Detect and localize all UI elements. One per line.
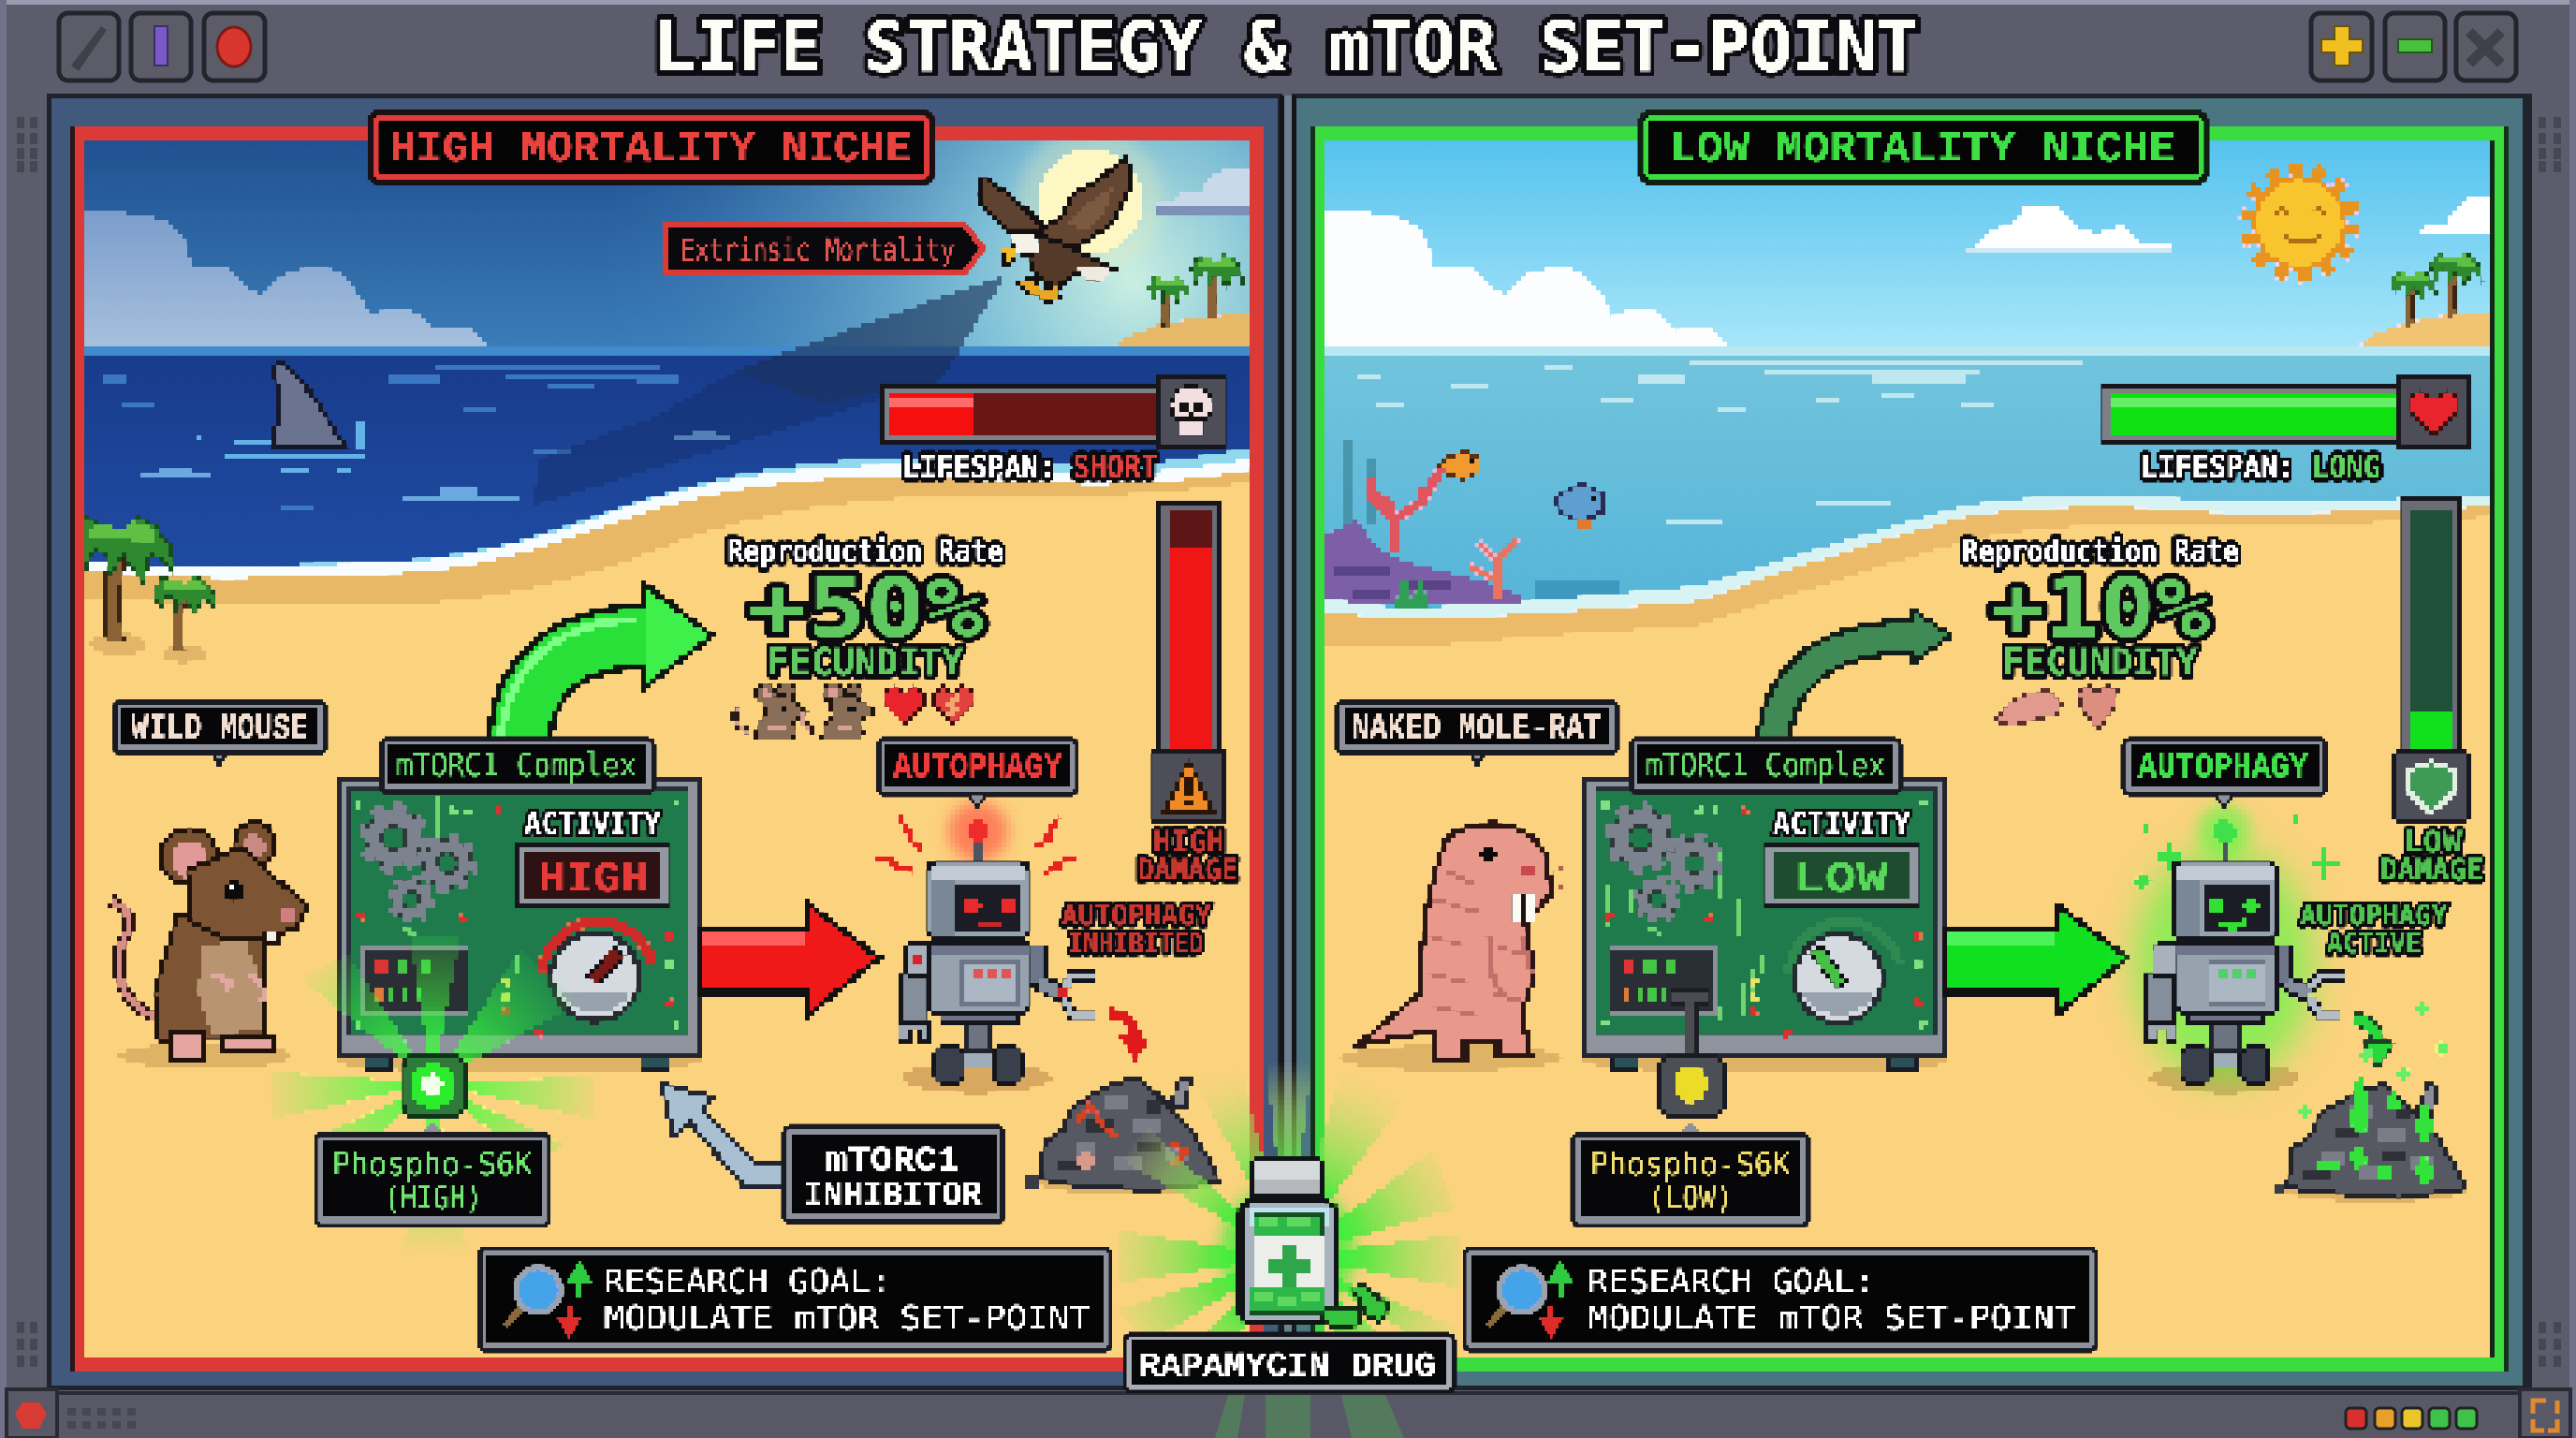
fish: orange xyxy=(1438,451,1479,479)
node: phospho-S6K high xyxy=(402,1056,464,1116)
icon: magnifier and arrows xyxy=(505,1266,588,1333)
callout: research goal left: MODULATE mTOR SET-POINT xyxy=(604,1299,1090,1338)
label: phospho-S6K low: (LOW) xyxy=(1648,1180,1733,1217)
illustration: naked mole-rat xyxy=(1339,824,1565,1071)
label: phospho-S6K high: Phospho-S6K xyxy=(332,1146,533,1183)
damage gauge: high xyxy=(1151,502,1225,822)
damage gauge: low xyxy=(2395,500,2467,822)
stat: +10 percent: +10% xyxy=(1990,560,2210,656)
label: naked mole-rat: NAKED MOLE-RAT xyxy=(1352,709,1602,751)
icons: mice and hearts xyxy=(735,683,973,740)
text: activity: ACTIVITY xyxy=(524,805,661,842)
board: mTORC1 complex low xyxy=(1582,779,1949,1073)
tag: extrinsic mortality: Extrinsic Mortality xyxy=(681,231,955,268)
window buttons: right xyxy=(2311,13,2516,81)
callout: research goal left xyxy=(480,1249,1110,1350)
center divider xyxy=(1280,95,1296,1388)
icon: magnifier and arrows right xyxy=(1488,1266,1569,1333)
connector: low signal stem xyxy=(1672,990,1709,1058)
label: rapamycin drug xyxy=(1125,1335,1454,1391)
glow rays and rapamycin bottle xyxy=(1114,1058,1460,1348)
label: autophagy active header: AUTOPHAGY xyxy=(2138,748,2308,788)
icon: smiling sun xyxy=(2247,170,2352,275)
stat: +50 percent: +50% xyxy=(748,560,984,656)
callout: research goal left: RESEARCH GOAL: xyxy=(604,1263,891,1301)
arrow: red curved to debris xyxy=(1109,1013,1151,1064)
text: autophagy active: ACTIVE xyxy=(2327,928,2422,961)
label: low damage: LOW xyxy=(2404,824,2463,859)
label: mTORC1 complex high xyxy=(382,740,653,792)
arrow: low fecundity xyxy=(1774,605,1955,749)
icons: mole-rat and heart xyxy=(1996,685,2117,730)
label: wild mouse: WILD MOUSE xyxy=(131,709,308,751)
icon: skull xyxy=(1171,387,1212,436)
dial: low xyxy=(1789,922,1899,1025)
glow rays: phospho high xyxy=(271,936,594,1259)
label: naked mole-rat xyxy=(1338,702,1617,765)
text: fecundity right: FECUNDITY xyxy=(2002,641,2198,684)
arrow: green curved to debris xyxy=(2352,1019,2394,1069)
icon: rapamycin bottle xyxy=(1240,1159,1389,1326)
robot: inhibited xyxy=(878,801,1097,1093)
label: autophagy inhibited header: AUTOPHAGY xyxy=(893,748,1062,788)
label: phospho-S6K low: Phospho-S6K xyxy=(1590,1146,1791,1183)
fish: blue xyxy=(1554,483,1604,528)
label: mTORC1 complex high: mTORC1 Complex xyxy=(396,747,637,785)
heading: low mortality niche: LOW MORTALITY NICHE xyxy=(1670,125,2175,175)
glow rays: rapamycin xyxy=(1114,1058,1460,1348)
debris pile: cleared xyxy=(2273,1002,2468,1202)
scene: dark ocean beach xyxy=(71,128,1249,1357)
label: low damage: DAMAGE xyxy=(2380,852,2483,888)
label: rapamycin drug: RAPAMYCIN DRUG xyxy=(1139,1347,1436,1387)
arrow: high fecundity xyxy=(501,577,717,749)
debris pile: uncleared xyxy=(1026,1077,1222,1195)
display: low xyxy=(1764,845,1919,907)
lifespan label: long: LIFESPAN: LONG xyxy=(2141,448,2380,485)
label: low damage xyxy=(2380,824,2483,888)
eagle xyxy=(978,157,1133,303)
panel: low mortality niche xyxy=(1295,95,2527,1388)
title: LIFE STRATEGY & mTOR SET-POINT xyxy=(653,6,1919,88)
text: fecundity: FECUNDITY xyxy=(768,641,963,684)
arrow: high output xyxy=(698,904,879,1015)
label: high damage: HIGH xyxy=(1153,824,1224,859)
label: phospho-S6K high xyxy=(316,1122,549,1225)
label: mTORC1 inhibitor xyxy=(784,1127,1003,1222)
node: phospho-S6K low xyxy=(1660,1056,1723,1116)
readout: high: HIGH xyxy=(538,856,649,904)
text: activity right: ACTIVITY xyxy=(1773,805,1910,842)
readout: low: LOW xyxy=(1793,856,1888,904)
lifespan bar: short xyxy=(883,376,1226,448)
text: autophagy inhibited: AUTOPHAGY xyxy=(1061,900,1211,932)
coral reef xyxy=(1326,440,1619,609)
text: autophagy inhibited xyxy=(1061,900,1211,961)
robot: active xyxy=(2132,803,2344,1093)
label: high damage: DAMAGE xyxy=(1137,852,1238,888)
icon: shield xyxy=(2408,762,2454,813)
callout: research goal right xyxy=(1465,1249,2096,1350)
label: phospho-S6K low xyxy=(1573,1122,1808,1225)
heading: low mortality niche xyxy=(1641,112,2206,183)
bottom bar: controls xyxy=(7,1389,2570,1438)
text: autophagy active xyxy=(2300,900,2448,961)
icon: loose pills xyxy=(1324,1284,1389,1326)
lifespan label: short: LIFESPAN: SHORT xyxy=(902,448,1158,485)
window buttons: left xyxy=(59,13,265,81)
label: autophagy active header xyxy=(2124,740,2325,807)
shark fin xyxy=(195,362,363,473)
label: mTORC1 complex low xyxy=(1632,740,1900,792)
text: reproduction rate: Reproduction Rate xyxy=(727,533,1003,569)
label: phospho-S6K high: (HIGH) xyxy=(384,1180,482,1217)
display: high xyxy=(518,845,669,907)
lifespan bar: long xyxy=(2101,376,2469,448)
text: autophagy active: AUTOPHAGY xyxy=(2300,900,2448,932)
scene: clear ocean beach xyxy=(1326,140,2492,1357)
heading: high mortality niche: HIGH MORTALITY NICHE xyxy=(390,125,912,175)
callout: research goal right: MODULATE mTOR SET-POINT xyxy=(1588,1299,2075,1338)
arrow: mTORC1 inhibitor xyxy=(661,1083,784,1187)
icon: warning triangle xyxy=(1165,760,1212,811)
panel: high mortality niche xyxy=(50,95,1281,1388)
text: reproduction rate right: Reproduction Rate xyxy=(1962,533,2239,569)
shadow of eagle xyxy=(534,274,1006,506)
label: wild mouse xyxy=(115,702,325,765)
label: mTORC1 inhibitor: mTORC1 xyxy=(826,1142,959,1181)
label: autophagy inhibited header xyxy=(879,740,1076,807)
label: high damage xyxy=(1137,824,1238,888)
text: autophagy inhibited: INHIBITED xyxy=(1068,928,1204,961)
board: mTORC1 complex high xyxy=(335,779,702,1073)
tag: extrinsic mortality xyxy=(666,225,983,273)
dial: high xyxy=(542,922,652,1023)
arrow: low output xyxy=(1945,904,2128,1015)
illustration: wild mouse xyxy=(110,822,307,1069)
label: mTORC1 complex low: mTORC1 Complex xyxy=(1646,747,1885,785)
heading: high mortality niche xyxy=(370,112,932,183)
callout: research goal right: RESEARCH GOAL: xyxy=(1588,1263,1875,1301)
icon: heart xyxy=(2409,391,2458,436)
label: mTORC1 inhibitor: INHIBITOR xyxy=(803,1177,983,1216)
